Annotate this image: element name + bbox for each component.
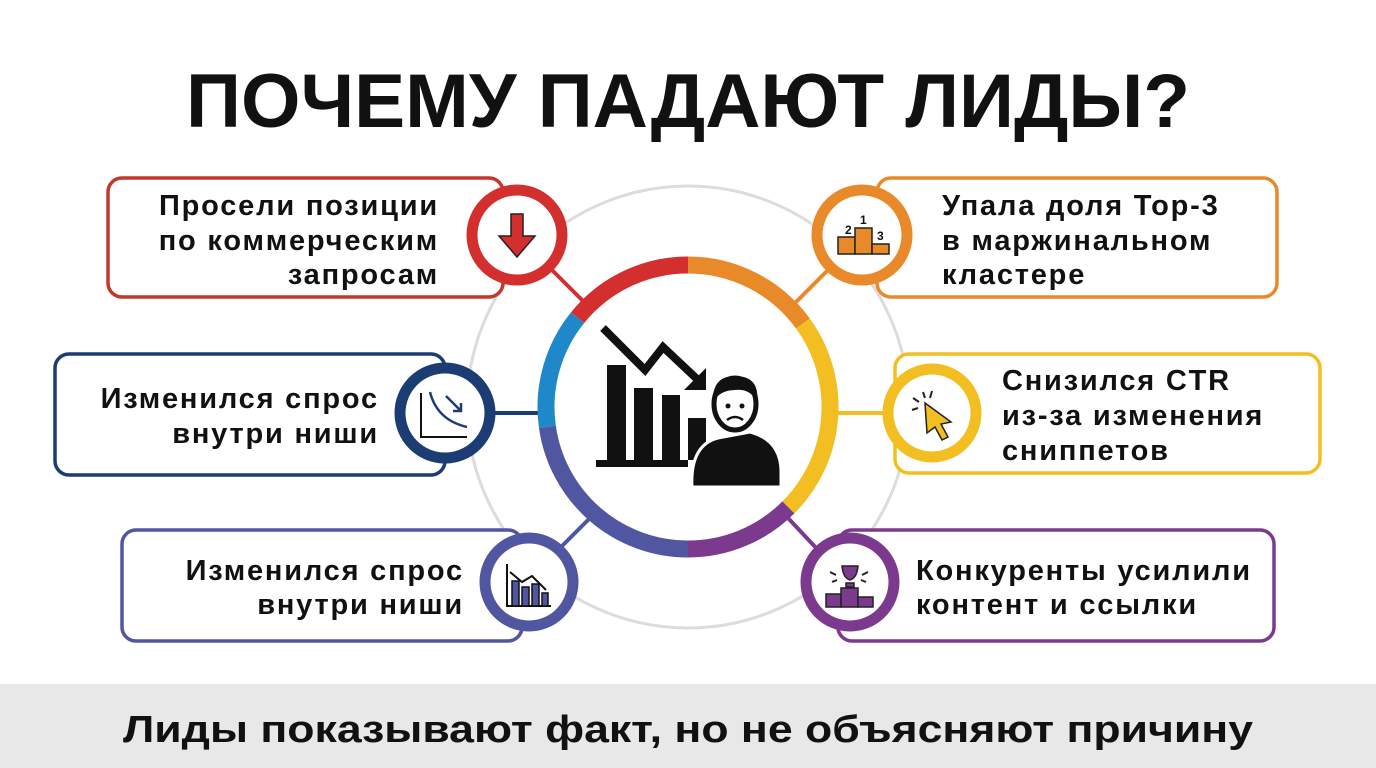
panel: purple card: Конкуренты усилили <box>916 555 1252 587</box>
footer band <box>0 684 1376 768</box>
central ring <box>546 265 830 549</box>
icon: podium <box>817 190 907 280</box>
panel: red card: Просели позиции <box>159 190 439 222</box>
icon: podium: 2 <box>845 223 852 237</box>
icon: cursor click <box>888 369 976 457</box>
icon: red down arrow <box>472 190 562 280</box>
icon: trophy podium <box>806 538 894 626</box>
panel: orange card <box>877 178 1277 297</box>
title: ПОЧЕМУ ПАДАЮТ ЛИДЫ? <box>186 59 1190 144</box>
panel: orange card: в маржинальном <box>942 225 1212 257</box>
panel: indigo card: Изменился спрос <box>186 555 464 587</box>
panel: yellow card: из-за изменения <box>1002 400 1264 432</box>
panel: navy card: внутри ниши <box>172 418 379 450</box>
panel: navy card: Изменился спрос <box>101 383 379 415</box>
panel: red card <box>108 178 503 297</box>
panel: orange card: кластере <box>942 259 1086 291</box>
footer band: Лиды показывают факт, но не объясняют причину <box>123 709 1253 751</box>
panel: yellow card: Снизился CTR <box>1002 365 1231 397</box>
panel: red card: запросам <box>288 259 439 291</box>
connectors <box>494 268 884 550</box>
panel: orange card: Упала доля Top-3 <box>942 190 1220 222</box>
icon: podium: 1 <box>860 213 867 227</box>
icon: center chart and sad person <box>596 328 781 487</box>
panel: red card: по коммерческим <box>159 225 439 257</box>
panel: yellow card <box>895 354 1320 473</box>
panel: yellow card: сниппетов <box>1002 435 1170 467</box>
panel: navy card <box>55 354 445 475</box>
panel: purple card <box>838 530 1274 641</box>
icon: podium: 3 <box>877 229 884 243</box>
icon: bar chart down <box>485 538 573 626</box>
panel: purple card: контент и ссылки <box>916 589 1198 621</box>
panel: indigo card <box>122 530 522 641</box>
panel: indigo card: внутри ниши <box>257 589 464 621</box>
icon: declining curve <box>400 368 490 458</box>
